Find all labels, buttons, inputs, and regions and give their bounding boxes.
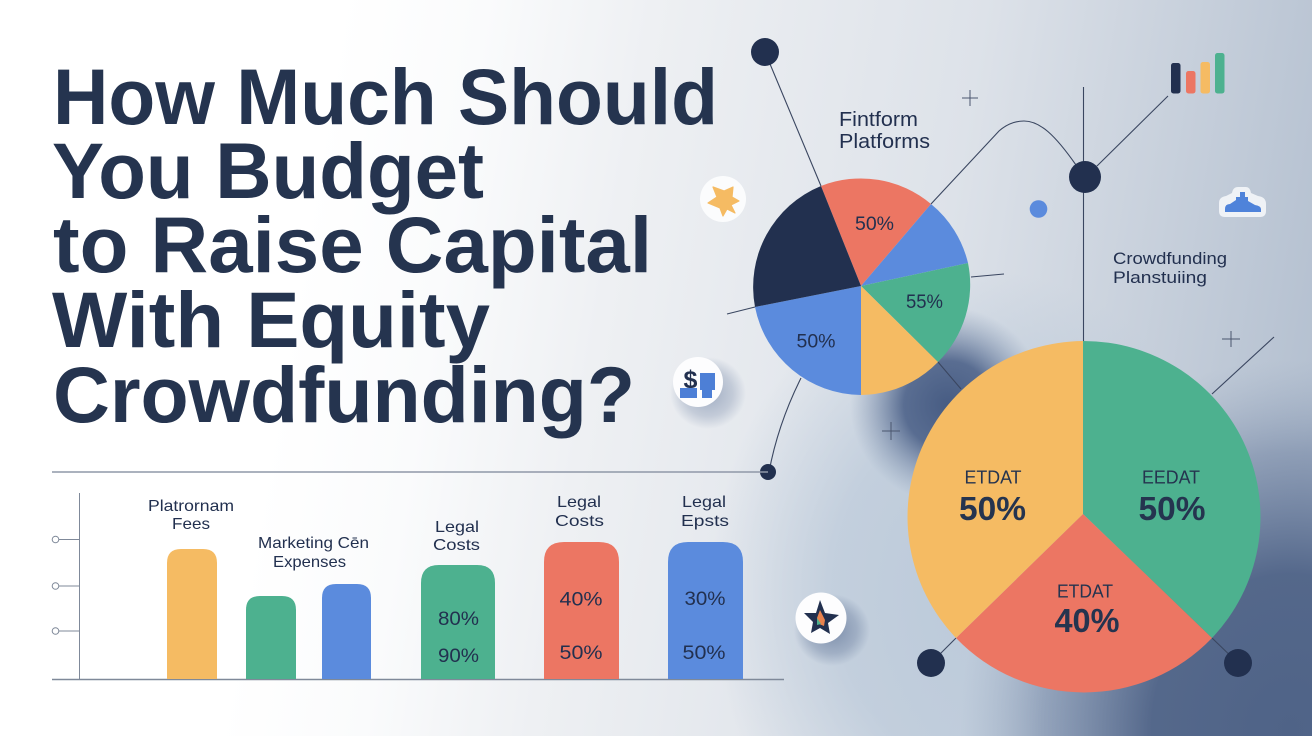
- panel: large pie chart: EEDAT: [1142, 468, 1200, 488]
- panel: small pie chart: 55%: [906, 292, 943, 313]
- bar labels: [148, 494, 729, 571]
- plus marks: [882, 90, 1240, 440]
- label: fintform platforms: Platforms: [839, 131, 930, 153]
- panel: small pie chart: [753, 178, 970, 395]
- connector lines: [727, 52, 1274, 663]
- bar values: 50%: [560, 643, 603, 664]
- bar labels: Marketing Cēn: [258, 535, 369, 552]
- bar values: 90%: [438, 646, 479, 667]
- title: to Raise Capital: [53, 200, 652, 289]
- label: crowdfunding: Planstuiing: [1113, 268, 1207, 287]
- bar values: 40%: [560, 590, 603, 610]
- panel: small pie chart: 50%: [796, 332, 836, 352]
- bar labels: Fees: [172, 516, 210, 533]
- bar labels: Costs: [433, 537, 480, 554]
- bars: [167, 542, 743, 679]
- bar labels: Expenses: [273, 554, 346, 571]
- panel: large pie chart: 50%: [959, 490, 1026, 527]
- icon: star badge: [700, 176, 746, 222]
- label: fintform platforms: Fintform: [839, 109, 918, 131]
- title: You Budget: [52, 126, 484, 215]
- node dots: [751, 38, 1252, 677]
- icon: navy star badge: [796, 592, 846, 644]
- title: With Equity: [52, 275, 490, 364]
- bar labels: Legal: [682, 494, 726, 511]
- bar labels: Platrornam: [148, 498, 234, 515]
- divider line: [52, 471, 768, 473]
- bar labels: Legal: [557, 494, 601, 511]
- bar values: 50%: [682, 643, 726, 664]
- title: Crowdfunding?: [53, 350, 635, 439]
- panel: large pie chart: ETDAT: [964, 468, 1022, 488]
- blue accent dot: [1030, 200, 1047, 218]
- icon: dollar badge: $: [684, 366, 698, 394]
- panel: bar chart: [52, 493, 784, 680]
- panel: large pie chart: 50%: [1138, 490, 1206, 527]
- bar labels: Epsts: [681, 513, 729, 530]
- label: crowdfunding: Crowdfunding: [1113, 249, 1227, 268]
- bar labels: Legal: [435, 519, 479, 536]
- title: [52, 52, 718, 439]
- panel: large pie chart: 40%: [1054, 602, 1120, 639]
- panel: large pie chart: [908, 341, 1260, 692]
- panel: small pie chart: 50%: [855, 214, 894, 235]
- bar values: 30%: [684, 589, 726, 610]
- bar values: 80%: [438, 609, 479, 630]
- icon: dollar badge: [673, 357, 723, 407]
- bar values: [438, 589, 726, 667]
- title: How Much Should: [53, 52, 718, 141]
- panel: large pie chart: ETDAT: [1057, 582, 1113, 602]
- label: crowdfunding: [1113, 249, 1227, 287]
- bar labels: Costs: [555, 513, 604, 530]
- mini bar chart icon: [1171, 53, 1224, 94]
- icon: cloud-shaped badge: [1219, 187, 1266, 217]
- chart axes: [52, 493, 784, 680]
- label: fintform platforms: [839, 109, 930, 153]
